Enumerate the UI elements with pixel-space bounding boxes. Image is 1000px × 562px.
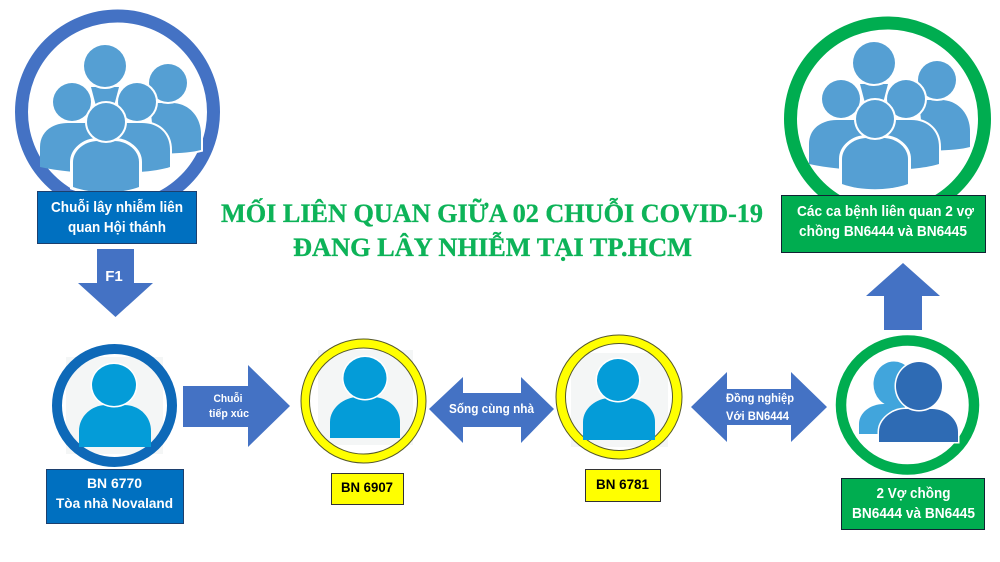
backing: pale square xyxy=(66,357,163,454)
label: church chain xyxy=(38,192,196,244)
ring: green circle xyxy=(841,340,974,470)
label: BN 6907: BN 6907 xyxy=(341,479,393,495)
node: couple BN6444 and BN6445 xyxy=(841,340,984,530)
label: couple: 2 Vợ chồng xyxy=(876,486,950,502)
icon: person xyxy=(79,364,151,447)
label: related cases: chồng BN6444 và BN6445 xyxy=(799,223,967,240)
arrow: living together: Sống cùng nhà xyxy=(449,401,535,416)
panel: church infection chain xyxy=(22,16,214,317)
icon: person xyxy=(583,359,655,440)
backing: pale square xyxy=(318,350,413,445)
backing: pale square xyxy=(571,353,668,447)
arrow: contact chain: tiếp xúc xyxy=(209,408,249,420)
label: related cases: Các ca bệnh liên quan 2 vợ xyxy=(797,203,974,220)
ring: dark blue circle xyxy=(57,349,172,462)
arrow: colleague: Đồng nghiệp xyxy=(726,391,794,405)
label: BN 6781 xyxy=(586,470,660,502)
label: couple: BN6444 và BN6445 xyxy=(852,506,975,522)
arrow: living together xyxy=(429,377,554,443)
icon: two people xyxy=(859,362,958,442)
arrow: contact chain: Chuỗi xyxy=(214,392,242,405)
icon: group of people xyxy=(809,42,970,189)
arrow: contact chain xyxy=(183,365,290,447)
icon: group of people xyxy=(40,45,201,192)
panel: related cases of couple xyxy=(782,23,986,330)
ring: green circle xyxy=(790,23,984,215)
label: related cases xyxy=(782,196,986,252)
node: BN 6770 xyxy=(46,349,184,524)
arrow: F1 down: F1 xyxy=(105,268,123,285)
label: church chain: Chuỗi lây nhiễm liên xyxy=(51,199,183,216)
ring: yellow circle xyxy=(556,335,682,459)
label: couple xyxy=(842,478,984,530)
label: BN 6770: BN 6770 xyxy=(87,475,142,491)
label: BN 6770: Tòa nhà Novaland xyxy=(56,495,173,511)
arrow: colleague: Với BN6444 xyxy=(726,409,789,423)
label: church chain: quan Hội thánh xyxy=(68,219,166,236)
ring: yellow circle xyxy=(301,339,426,463)
title: MỐI LIÊN QUAN GIỮA 02 CHUỖI COVID-19 xyxy=(221,198,763,228)
arrow: up xyxy=(866,263,940,330)
ring: blue circle xyxy=(22,16,214,208)
title xyxy=(221,198,763,262)
label: BN 6907 xyxy=(332,474,404,504)
arrow: F1 down xyxy=(78,249,153,317)
label: BN 6781: BN 6781 xyxy=(596,476,649,492)
label: BN 6770 xyxy=(46,470,184,524)
node: BN 6781 xyxy=(556,335,682,502)
title: ĐANG LÂY NHIỄM TẠI TP.HCM xyxy=(293,233,692,262)
icon: person xyxy=(330,357,400,438)
node: BN 6907 xyxy=(301,339,426,504)
arrow: colleague xyxy=(691,372,827,442)
